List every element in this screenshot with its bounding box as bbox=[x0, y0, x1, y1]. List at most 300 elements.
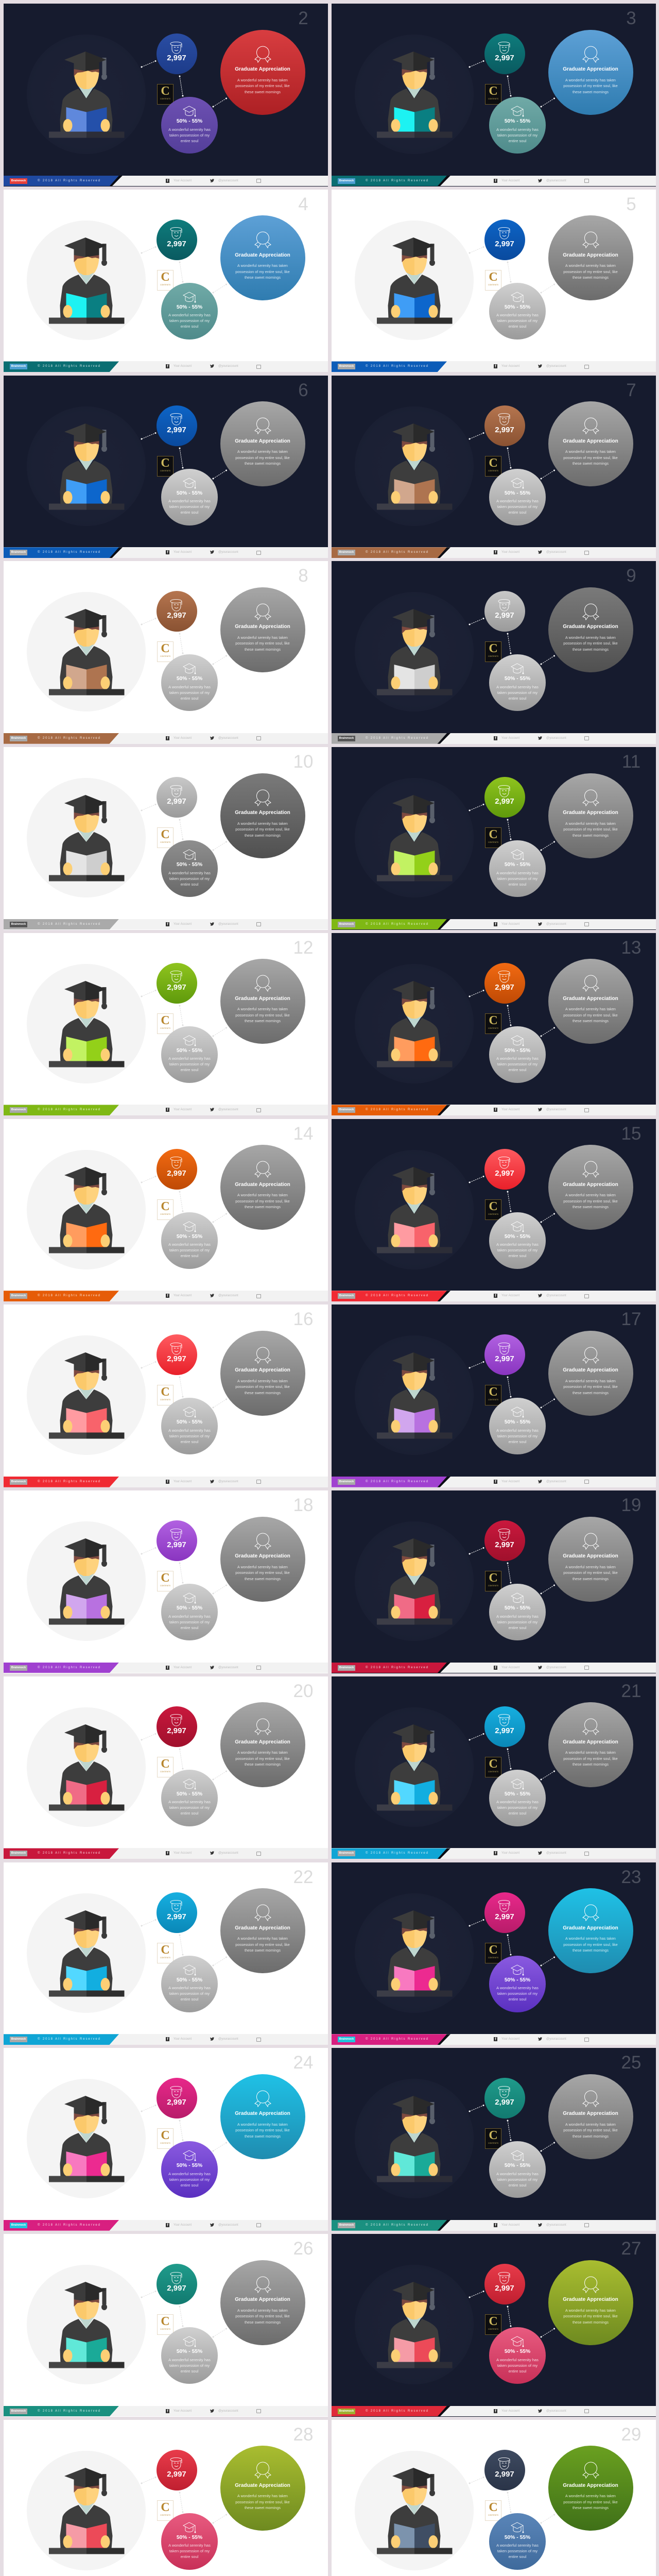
main circle: A wonderful serenity has taken bbox=[237, 821, 288, 825]
main circle: possession of my entire soul, like bbox=[563, 641, 618, 646]
percent circle: taken possession of my bbox=[497, 2363, 537, 2368]
percent circle: A wonderful serenity has bbox=[496, 1986, 539, 1990]
main circle bbox=[220, 959, 305, 1044]
backdrop circle bbox=[355, 778, 474, 897]
footer: Your Account bbox=[174, 1108, 192, 1111]
percent circle bbox=[161, 1212, 218, 1268]
student illustration bbox=[377, 2468, 452, 2554]
main circle: Graduate Appreciation bbox=[235, 66, 290, 72]
percent circle: 50% - 55% bbox=[505, 676, 530, 682]
backdrop circle bbox=[27, 1707, 146, 1827]
watermark badge: C bbox=[489, 1199, 498, 1213]
main circle: A wonderful serenity has taken bbox=[237, 1750, 288, 1755]
slide 25 bbox=[332, 2048, 656, 2231]
stat circle: 2,997 bbox=[495, 54, 514, 62]
watermark badge: CONTENTS bbox=[488, 1399, 498, 1401]
main circle: A wonderful serenity has taken bbox=[565, 2122, 616, 2127]
main circle bbox=[548, 773, 633, 858]
percent circle bbox=[161, 283, 218, 340]
footer: © 2018 All Rights Reserved bbox=[38, 2224, 101, 2227]
main circle: A wonderful serenity has taken bbox=[565, 1936, 616, 1941]
backdrop circle bbox=[27, 2265, 146, 2384]
student illustration bbox=[377, 1352, 452, 1439]
footer: f bbox=[495, 2224, 496, 2227]
footer: © 2018 All Rights Reserved bbox=[366, 1480, 429, 1483]
main circle: possession of my entire soul, like bbox=[563, 1384, 618, 1389]
main circle: Graduate Appreciation bbox=[563, 66, 618, 72]
footer: Your Account bbox=[501, 1666, 519, 1669]
percent circle: A wonderful serenity has bbox=[168, 127, 211, 132]
footer: © 2018 All Rights Reserved bbox=[38, 365, 101, 368]
watermark badge: CONTENTS bbox=[160, 1399, 170, 1401]
backdrop circle bbox=[355, 1335, 474, 1455]
footer bbox=[3, 1477, 328, 1487]
connectors bbox=[468, 1175, 556, 1223]
footer bbox=[332, 1291, 656, 1301]
percent circle: taken possession of my bbox=[497, 690, 537, 695]
footer: f bbox=[167, 1852, 168, 1855]
percent circle: A wonderful serenity has bbox=[496, 127, 539, 132]
connectors bbox=[141, 804, 227, 851]
slide 7 bbox=[332, 375, 656, 558]
footer: © 2018 All Rights Reserved bbox=[366, 365, 429, 368]
percent circle bbox=[489, 654, 546, 711]
percent circle: A wonderful serenity has bbox=[168, 1428, 211, 1433]
watermark badge: CONTENTS bbox=[160, 2514, 170, 2516]
stat circle: 2,997 bbox=[495, 1540, 514, 1549]
student illustration bbox=[48, 2096, 125, 2182]
connectors bbox=[141, 246, 227, 294]
percent circle bbox=[161, 1956, 218, 2012]
watermark badge bbox=[157, 2314, 174, 2335]
footer: © 2018 All Rights Reserved bbox=[366, 179, 429, 182]
stat circle bbox=[484, 33, 525, 74]
slide 23 bbox=[332, 1862, 656, 2045]
footer: Brainmock bbox=[11, 1108, 26, 1111]
student illustration bbox=[377, 1910, 452, 1997]
main circle: possession of my entire soul, like bbox=[235, 641, 290, 646]
percent circle: entire soul bbox=[181, 1811, 198, 1816]
percent circle: taken possession of my bbox=[169, 876, 210, 881]
main circle: these sweet mornings bbox=[245, 461, 281, 466]
footer: f bbox=[495, 1852, 496, 1855]
watermark badge: C bbox=[161, 642, 170, 655]
percent circle: entire soul bbox=[509, 2369, 526, 2373]
main circle bbox=[548, 1145, 633, 1230]
slide 28 bbox=[3, 2420, 328, 2576]
percent circle: taken possession of my bbox=[497, 876, 537, 881]
slide number: 29 bbox=[621, 2425, 641, 2445]
stat circle: 2,997 bbox=[495, 2098, 514, 2107]
main circle: possession of my entire soul, like bbox=[235, 2128, 290, 2132]
main circle bbox=[220, 773, 305, 858]
stat circle: 2,997 bbox=[167, 1354, 186, 1363]
main circle: Graduate Appreciation bbox=[235, 1553, 290, 1559]
footer: © 2018 All Rights Reserved bbox=[366, 1666, 429, 1669]
percent circle: taken possession of my bbox=[169, 1248, 210, 1252]
footer: Brainmock bbox=[339, 1852, 354, 1855]
percent circle: A wonderful serenity has bbox=[168, 1056, 211, 1061]
footer: Your Account bbox=[501, 365, 519, 368]
stat circle bbox=[484, 1149, 525, 1189]
footer bbox=[3, 919, 328, 929]
stat circle bbox=[157, 2264, 197, 2304]
footer: © 2018 All Rights Reserved bbox=[38, 737, 101, 740]
percent circle bbox=[161, 654, 218, 711]
percent circle: 50% - 55% bbox=[505, 862, 530, 868]
main circle: these sweet mornings bbox=[573, 90, 609, 94]
main circle bbox=[548, 2446, 633, 2531]
footer: © 2018 All Rights Reserved bbox=[38, 2038, 101, 2041]
footer: @youraccount bbox=[546, 551, 566, 554]
slide number: 21 bbox=[621, 1681, 641, 1701]
percent circle bbox=[161, 1026, 218, 1083]
stat circle bbox=[484, 2264, 525, 2304]
percent circle: entire soul bbox=[509, 1811, 526, 1816]
main circle: these sweet mornings bbox=[245, 1019, 281, 1023]
slide 8 bbox=[3, 561, 328, 744]
footer: Brainmock bbox=[339, 737, 354, 740]
percent circle: A wonderful serenity has bbox=[496, 1056, 539, 1061]
watermark badge bbox=[157, 2500, 174, 2521]
watermark badge bbox=[485, 2500, 501, 2521]
watermark badge: CONTENTS bbox=[160, 2142, 170, 2144]
footer: © 2018 All Rights Reserved bbox=[38, 1666, 101, 1669]
percent circle: taken possession of my bbox=[169, 318, 210, 323]
slide number: 25 bbox=[621, 2053, 641, 2073]
main circle: possession of my entire soul, like bbox=[563, 2500, 618, 2504]
backdrop circle bbox=[355, 1150, 474, 1269]
footer: Brainmock bbox=[339, 1480, 354, 1483]
main circle: these sweet mornings bbox=[573, 275, 609, 280]
footer: Brainmock bbox=[11, 1666, 26, 1669]
watermark badge bbox=[157, 827, 174, 848]
main circle: possession of my entire soul, like bbox=[563, 1570, 618, 1575]
footer: Your Account bbox=[174, 1480, 192, 1483]
main circle: Graduate Appreciation bbox=[235, 996, 290, 1002]
watermark badge bbox=[157, 455, 174, 476]
main circle: A wonderful serenity has taken bbox=[237, 1936, 288, 1941]
main circle: A wonderful serenity has taken bbox=[565, 77, 616, 82]
footer: @youraccount bbox=[546, 2038, 566, 2041]
connectors bbox=[469, 432, 555, 479]
percent circle: 50% - 55% bbox=[177, 1977, 202, 1982]
main circle: these sweet mornings bbox=[245, 90, 281, 94]
main circle bbox=[548, 1702, 633, 1787]
main circle: possession of my entire soul, like bbox=[235, 1756, 290, 1761]
percent circle bbox=[489, 2141, 546, 2198]
percent circle: taken possession of my bbox=[497, 2177, 537, 2182]
percent circle: taken possession of my bbox=[497, 2549, 537, 2553]
watermark badge bbox=[485, 455, 501, 476]
footer: © 2018 All Rights Reserved bbox=[38, 2410, 101, 2413]
footer: @youraccount bbox=[218, 1480, 238, 1483]
watermark badge: C bbox=[161, 2315, 170, 2328]
watermark badge: C bbox=[161, 1199, 170, 1213]
footer bbox=[3, 2220, 328, 2231]
slide number: 6 bbox=[298, 380, 308, 400]
main circle: Graduate Appreciation bbox=[563, 1739, 618, 1745]
footer: @youraccount bbox=[546, 2224, 566, 2227]
slide 2 bbox=[3, 4, 328, 187]
stat circle: 2,997 bbox=[167, 1726, 186, 1735]
percent circle: taken possession of my bbox=[497, 133, 537, 137]
slide number: 19 bbox=[621, 1495, 641, 1515]
stat circle: 2,997 bbox=[167, 611, 186, 620]
slide 12 bbox=[3, 933, 328, 1115]
main circle: possession of my entire soul, like bbox=[235, 1570, 290, 1575]
footer: f bbox=[167, 1294, 168, 1298]
watermark badge: CONTENTS bbox=[160, 284, 170, 286]
footer: © 2018 All Rights Reserved bbox=[366, 1852, 429, 1855]
main circle bbox=[220, 2446, 305, 2531]
slide 4 bbox=[3, 190, 328, 372]
main circle: A wonderful serenity has taken bbox=[237, 635, 288, 640]
percent circle: taken possession of my bbox=[497, 1062, 537, 1066]
footer: © 2018 All Rights Reserved bbox=[38, 179, 101, 182]
percent circle bbox=[161, 1398, 218, 1454]
footer: f bbox=[495, 365, 496, 368]
percent circle: entire soul bbox=[509, 2183, 526, 2188]
backdrop circle bbox=[355, 221, 474, 340]
student illustration bbox=[377, 423, 452, 510]
footer bbox=[3, 2034, 328, 2045]
connectors bbox=[468, 2290, 556, 2338]
percent circle: entire soul bbox=[181, 2183, 198, 2188]
footer: © 2018 All Rights Reserved bbox=[366, 737, 429, 740]
connectors bbox=[140, 2104, 228, 2153]
percent circle bbox=[489, 1212, 546, 1268]
main circle: Graduate Appreciation bbox=[563, 1367, 618, 1373]
watermark badge bbox=[157, 1571, 174, 1591]
main circle: possession of my entire soul, like bbox=[235, 1013, 290, 1018]
connectors bbox=[469, 246, 555, 294]
main circle: these sweet mornings bbox=[245, 1762, 281, 1767]
percent circle: 50% - 55% bbox=[177, 304, 202, 310]
watermark badge bbox=[157, 1199, 174, 1220]
main circle: Graduate Appreciation bbox=[563, 2111, 618, 2116]
percent circle: 50% - 55% bbox=[505, 1977, 530, 1982]
stat circle: 2,997 bbox=[495, 426, 514, 434]
backdrop circle bbox=[27, 2079, 146, 2198]
percent circle: taken possession of my bbox=[169, 1805, 210, 1810]
main circle: possession of my entire soul, like bbox=[235, 1198, 290, 1204]
percent circle: A wonderful serenity has bbox=[168, 313, 211, 317]
main circle: A wonderful serenity has taken bbox=[237, 2308, 288, 2312]
percent circle: taken possession of my bbox=[169, 1991, 210, 1996]
stat circle: 2,997 bbox=[167, 2098, 186, 2107]
main circle: possession of my entire soul, like bbox=[563, 827, 618, 832]
watermark badge: C bbox=[489, 270, 498, 284]
main circle: these sweet mornings bbox=[245, 2134, 281, 2139]
connectors bbox=[468, 2476, 556, 2524]
watermark badge bbox=[485, 1013, 501, 1034]
footer: @youraccount bbox=[546, 365, 566, 368]
main circle: A wonderful serenity has taken bbox=[565, 1564, 616, 1569]
main circle: A wonderful serenity has taken bbox=[565, 449, 616, 454]
percent circle: A wonderful serenity has bbox=[496, 1242, 539, 1247]
footer bbox=[3, 547, 328, 558]
percent circle bbox=[161, 1584, 218, 1640]
footer: Brainmock bbox=[339, 1294, 354, 1297]
stat circle: 2,997 bbox=[495, 2284, 514, 2293]
main circle: A wonderful serenity has taken bbox=[237, 449, 288, 454]
footer: Your Account bbox=[174, 179, 192, 182]
watermark badge: CONTENTS bbox=[488, 284, 498, 286]
footer: Brainmock bbox=[11, 179, 26, 182]
backdrop circle bbox=[355, 964, 474, 1083]
main circle: possession of my entire soul, like bbox=[563, 1013, 618, 1018]
percent circle: taken possession of my bbox=[169, 690, 210, 695]
percent circle: entire soul bbox=[181, 2369, 198, 2373]
main circle: these sweet mornings bbox=[573, 1205, 609, 1209]
percent circle: entire soul bbox=[509, 138, 526, 143]
slide 13 bbox=[332, 933, 656, 1115]
stat circle bbox=[484, 591, 525, 632]
footer: @youraccount bbox=[546, 179, 566, 182]
slide 29 bbox=[332, 2420, 656, 2576]
student illustration bbox=[49, 795, 125, 881]
connectors bbox=[468, 1919, 556, 1967]
watermark badge: C bbox=[161, 1385, 170, 1399]
watermark badge: C bbox=[489, 642, 498, 655]
main circle: possession of my entire soul, like bbox=[563, 1942, 618, 1946]
main circle: A wonderful serenity has taken bbox=[237, 1379, 288, 1383]
percent circle: taken possession of my bbox=[497, 1248, 537, 1252]
footer: © 2018 All Rights Reserved bbox=[366, 1108, 429, 1111]
watermark badge bbox=[485, 84, 501, 105]
slide 11 bbox=[332, 747, 656, 929]
footer: © 2018 All Rights Reserved bbox=[38, 1108, 101, 1111]
main circle: Graduate Appreciation bbox=[563, 2483, 618, 2488]
main circle: possession of my entire soul, like bbox=[563, 1756, 618, 1761]
percent circle: entire soul bbox=[509, 1439, 526, 1444]
slide 3 bbox=[332, 4, 656, 187]
main circle: these sweet mornings bbox=[573, 1948, 609, 1953]
percent circle bbox=[489, 1770, 546, 1826]
watermark badge: C bbox=[489, 2315, 498, 2328]
watermark badge: CONTENTS bbox=[160, 1957, 170, 1959]
percent circle: A wonderful serenity has bbox=[168, 1614, 211, 1619]
student illustration bbox=[49, 423, 125, 510]
main circle: A wonderful serenity has taken bbox=[237, 2122, 288, 2127]
slide number: 23 bbox=[621, 1867, 641, 1887]
main circle: A wonderful serenity has taken bbox=[237, 1564, 288, 1569]
watermark badge bbox=[157, 1385, 174, 1405]
connectors bbox=[141, 60, 227, 107]
student illustration bbox=[48, 2282, 125, 2368]
connectors bbox=[140, 989, 228, 1038]
backdrop circle bbox=[355, 406, 474, 526]
main circle: Graduate Appreciation bbox=[235, 1925, 290, 1931]
percent circle: A wonderful serenity has bbox=[496, 1428, 539, 1433]
percent circle: entire soul bbox=[509, 324, 526, 329]
percent circle: 50% - 55% bbox=[177, 1048, 202, 1054]
footer: f bbox=[495, 1108, 496, 1112]
watermark badge bbox=[157, 1942, 174, 1963]
percent circle: A wonderful serenity has bbox=[168, 2358, 211, 2362]
percent circle bbox=[489, 1584, 546, 1640]
percent circle: 50% - 55% bbox=[505, 1605, 530, 1611]
slide 5 bbox=[332, 190, 656, 372]
watermark badge: C bbox=[161, 2129, 170, 2142]
main circle: possession of my entire soul, like bbox=[563, 455, 618, 460]
footer: © 2018 All Rights Reserved bbox=[38, 551, 101, 554]
connectors bbox=[468, 1547, 556, 1595]
main circle: possession of my entire soul, like bbox=[235, 1942, 290, 1946]
percent circle: taken possession of my bbox=[169, 1434, 210, 1438]
footer: f bbox=[167, 365, 168, 368]
footer: Brainmock bbox=[339, 2224, 354, 2227]
footer bbox=[3, 1105, 328, 1115]
main circle: A wonderful serenity has taken bbox=[237, 263, 288, 268]
main circle: these sweet mornings bbox=[573, 2134, 609, 2139]
main circle: Graduate Appreciation bbox=[563, 1553, 618, 1559]
percent circle: 50% - 55% bbox=[505, 1419, 530, 1425]
footer: @youraccount bbox=[218, 2224, 238, 2227]
stat circle bbox=[157, 2078, 197, 2119]
connectors bbox=[140, 1547, 228, 1595]
slide number: 7 bbox=[626, 380, 636, 400]
footer: Your Account bbox=[174, 1294, 192, 1297]
watermark badge bbox=[157, 641, 174, 662]
footer: Your Account bbox=[501, 179, 519, 182]
main circle bbox=[220, 30, 305, 114]
watermark badge bbox=[157, 1013, 174, 1034]
percent circle bbox=[161, 97, 218, 154]
footer bbox=[3, 1848, 328, 1859]
main circle: A wonderful serenity has taken bbox=[237, 2494, 288, 2498]
slide 26 bbox=[3, 2234, 328, 2416]
footer bbox=[332, 547, 656, 558]
footer: Brainmock bbox=[339, 1666, 354, 1669]
percent circle: 50% - 55% bbox=[177, 2535, 202, 2540]
stat circle: 2,997 bbox=[167, 54, 186, 62]
watermark badge bbox=[485, 641, 501, 662]
slide number: 12 bbox=[293, 938, 313, 958]
student illustration bbox=[48, 1910, 125, 1997]
slide 19 bbox=[332, 1490, 656, 1673]
footer bbox=[332, 919, 656, 929]
footer: f bbox=[167, 737, 168, 740]
percent circle bbox=[489, 1398, 546, 1454]
percent circle: taken possession of my bbox=[169, 504, 210, 509]
footer: Brainmock bbox=[339, 551, 354, 554]
backdrop circle bbox=[27, 964, 146, 1083]
footer: @youraccount bbox=[546, 1480, 566, 1483]
main circle bbox=[220, 2074, 305, 2159]
main circle bbox=[220, 2260, 305, 2345]
footer bbox=[3, 1663, 328, 1673]
main circle: possession of my entire soul, like bbox=[563, 1198, 618, 1204]
main circle: A wonderful serenity has taken bbox=[237, 77, 288, 82]
footer: @youraccount bbox=[218, 1108, 238, 1111]
percent circle: A wonderful serenity has bbox=[496, 313, 539, 317]
backdrop circle bbox=[27, 1893, 146, 2012]
stat circle bbox=[484, 2078, 525, 2119]
stat circle: 2,997 bbox=[495, 240, 514, 248]
footer: Your Account bbox=[174, 551, 192, 554]
main circle bbox=[548, 30, 633, 114]
watermark badge: CONTENTS bbox=[160, 1585, 170, 1587]
slide 17 bbox=[332, 1304, 656, 1487]
slide 10 bbox=[3, 747, 328, 929]
percent circle: 50% - 55% bbox=[505, 304, 530, 310]
percent circle: entire soul bbox=[509, 1253, 526, 1258]
footer bbox=[3, 733, 328, 744]
footer: Brainmock bbox=[11, 1480, 26, 1483]
percent circle bbox=[161, 2513, 218, 2570]
